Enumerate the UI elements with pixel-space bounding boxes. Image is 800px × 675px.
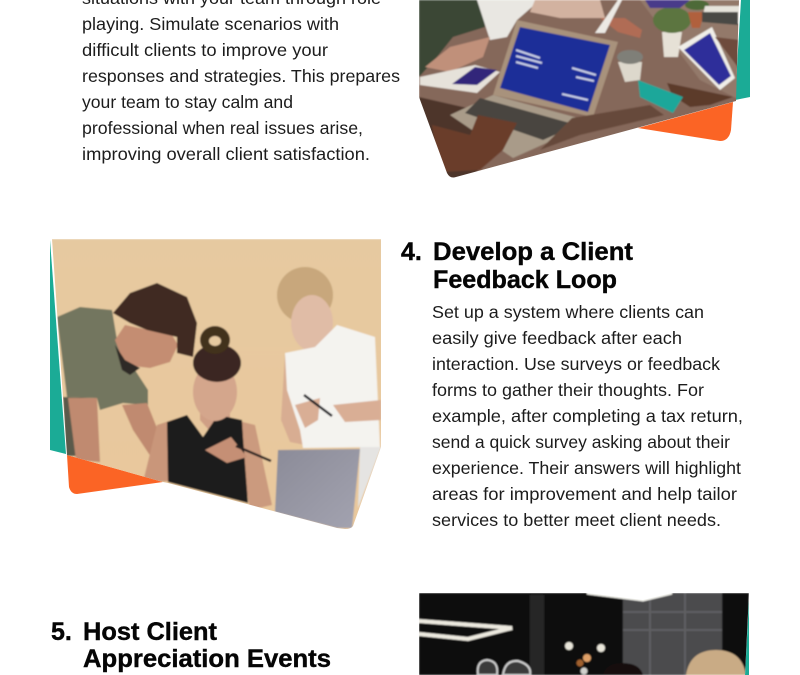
accent: orange shape [67, 455, 163, 494]
accent: orange shape [638, 102, 733, 141]
body text: step 4: experience. Their answers will highlight [432, 458, 741, 478]
body text: step 3: playing. Simulate scenarios with [82, 14, 339, 34]
body text: step 4: areas for improvement and help tailor [432, 484, 737, 504]
body text: step 3: professional when real issues arise, [82, 118, 363, 138]
body text: step 4: example, after completing a tax return, [432, 406, 743, 426]
step 4 heading [401, 238, 634, 294]
body text: step 3: responses and strategies. This prepares [82, 66, 400, 86]
body text: step 4: Set up a system where clients can [432, 302, 704, 322]
step 4 heading: Develop a Client [433, 238, 634, 266]
photo: colleagues [50, 239, 382, 530]
body text: step 4 [432, 302, 743, 530]
body text: step 3: your team to stay calm and [82, 92, 293, 112]
photo panel: team meeting with laptop [419, 0, 750, 180]
body text: step 3: difficult clients to improve your [82, 40, 328, 60]
photo panel: client appreciation event [419, 593, 749, 675]
step 4 heading: 4. [401, 238, 422, 266]
body text: step 3: improving overall client satisfaction. [82, 144, 370, 164]
step 5 heading: Host Client [83, 618, 218, 646]
body text: step 3 [82, 0, 400, 164]
step 5 heading: 5. [51, 618, 72, 646]
body text: step 4: forms to gather their thoughts. For [432, 380, 704, 400]
accent: teal shape [735, 0, 750, 100]
body text: step 4: easily give feedback after each [432, 328, 682, 348]
accent: teal shape [50, 240, 66, 454]
photo panel: three colleagues at a laptop [50, 239, 382, 530]
body text: step 4: send a quick survey asking about their [432, 432, 730, 452]
body text: step 4: services to better meet client needs. [432, 510, 721, 530]
accent: teal shape [745, 600, 749, 675]
photo: evening venue [419, 593, 749, 675]
body text: step 4: interaction. Use surveys or feedback [432, 354, 720, 374]
step 4 heading: Feedback Loop [433, 266, 617, 294]
photo: meeting table [419, 0, 741, 180]
step 5 heading: Appreciation Events [83, 645, 331, 673]
step 5 heading [51, 618, 331, 673]
